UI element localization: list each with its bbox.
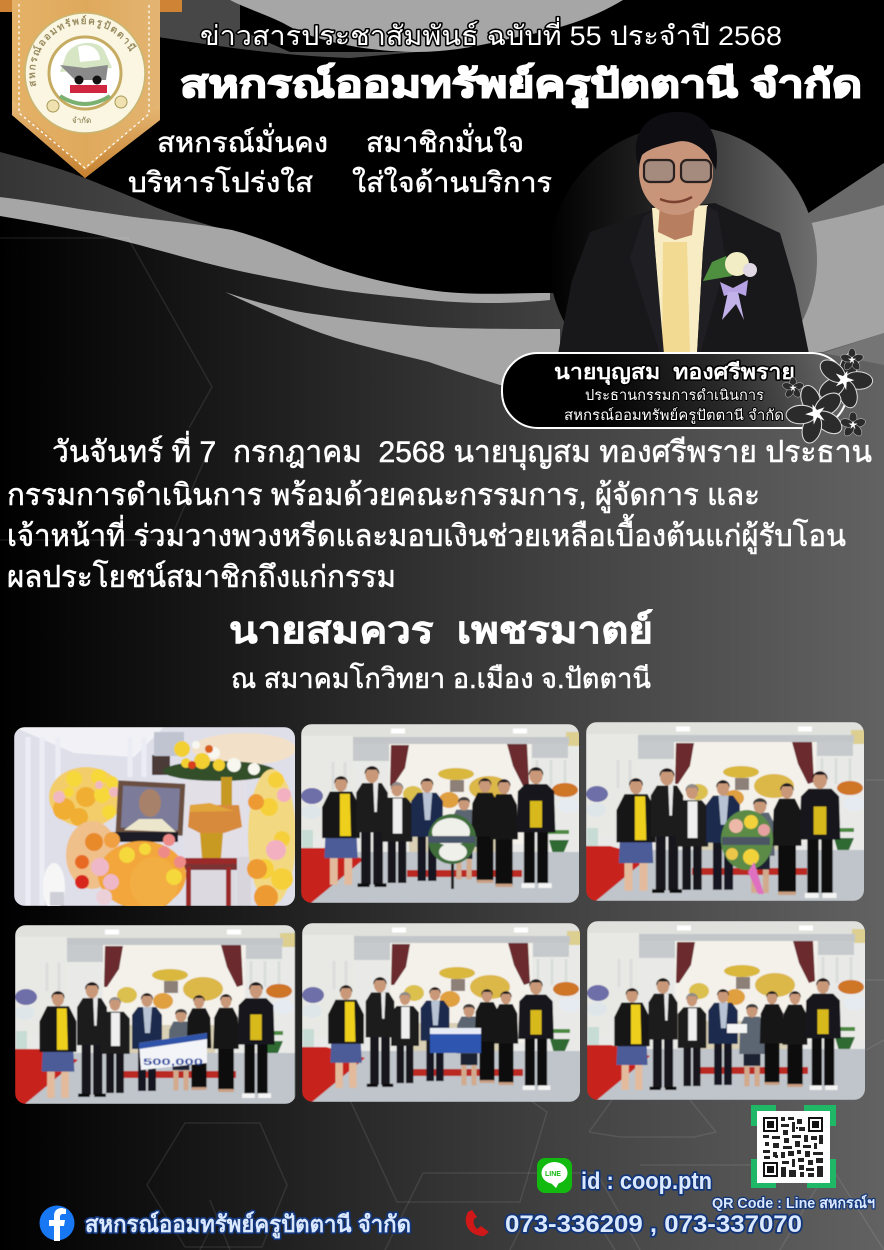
name plate [502,353,847,428]
cheque board [139,1033,207,1070]
people [328,977,554,1090]
logo emblem: สหกรณ์ออมทรัพย์ครูปัตตานี [29,15,137,87]
icon: LINE [537,1158,572,1193]
body text: กรรมการดำเนินการ พร้อมด้วยคณะกรรมการ, ผู้จัดการ และ [7,479,760,513]
cheque board: 500,000 [143,1057,203,1067]
photo: presenting cheque [15,925,295,1104]
logo ribbon [0,0,182,178]
body text: เจ้าหน้าที่ ร่วมวางพวงหรีดและมอบเงินช่วยเหลือเบื้องต้นแก่ผู้รับโอน [7,514,846,554]
QR caption: QR Code : Line สหกรณ์ฯ [712,1194,875,1212]
icon: phone [466,1210,489,1236]
people [616,768,840,898]
slogans: สมาชิกมั่นใจ [366,123,524,158]
slogans: บริหารโปร่งใส [128,166,313,198]
photo: memorial altar [14,727,296,911]
line id: id : coop.ptn [581,1168,712,1195]
venue: ณ สมาคมโกวิทยา อ.เมือง จ.ปัตตานี [231,662,651,694]
donation board [430,1028,481,1053]
wreath [428,814,476,889]
corsage [703,252,757,320]
body text [7,431,872,594]
chairman portrait [558,112,809,354]
photo: presenting blue board [302,923,582,1102]
photo: colourful wreath [586,722,866,901]
people [614,978,841,1090]
icon: frangipani flowers [776,343,882,453]
name plate: นายบุญสม ทองศรีพราย [554,360,795,386]
envelope [727,1024,747,1033]
header line: ข่าวสารประชาสัมพันธ์ ฉบับที่ 55 ประจำปี 2568 [200,17,782,51]
slogans: ใส่ใจด้านบริการ [352,166,552,198]
people [322,766,555,888]
people [39,982,275,1098]
name plate: สหกรณ์ออมทรัพย์ครูปัตตานี จำกัด [564,407,784,424]
slogans: สหกรณ์มั่นคง [157,123,328,158]
slogans [128,123,552,198]
body text: ผลประโยชน์สมาชิกถึงแก่กรรม [7,559,396,594]
photo: laying wreath [301,724,581,903]
phone numbers: 073-336209 , 073-337070 [505,1211,802,1238]
icon: LINE: LINE [545,1171,561,1178]
icon: facebook [40,1206,74,1241]
logo emblem: จำกัด [72,116,91,125]
title: สหกรณ์ออมทรัพย์ครูปัตตานี จำกัด [180,63,862,108]
logo emblem [24,12,146,134]
background swooshes [0,0,884,394]
facebook page name: สหกรณ์ออมทรัพย์ครูปัตตานี จำกัด [85,1211,411,1239]
photo: handing envelope [587,921,867,1100]
wreath [721,810,773,894]
body text: วันจันทร์ ที่ 7 กรกฎาคม 2568 นายบุญสม ทองศรีพราย ประธาน [52,431,872,471]
QR code [751,1105,836,1188]
name plate: ประธานกรรมการดำเนินการ [585,388,764,404]
deceased member name: นายสมควร เพชรมาตย์ [229,609,653,652]
